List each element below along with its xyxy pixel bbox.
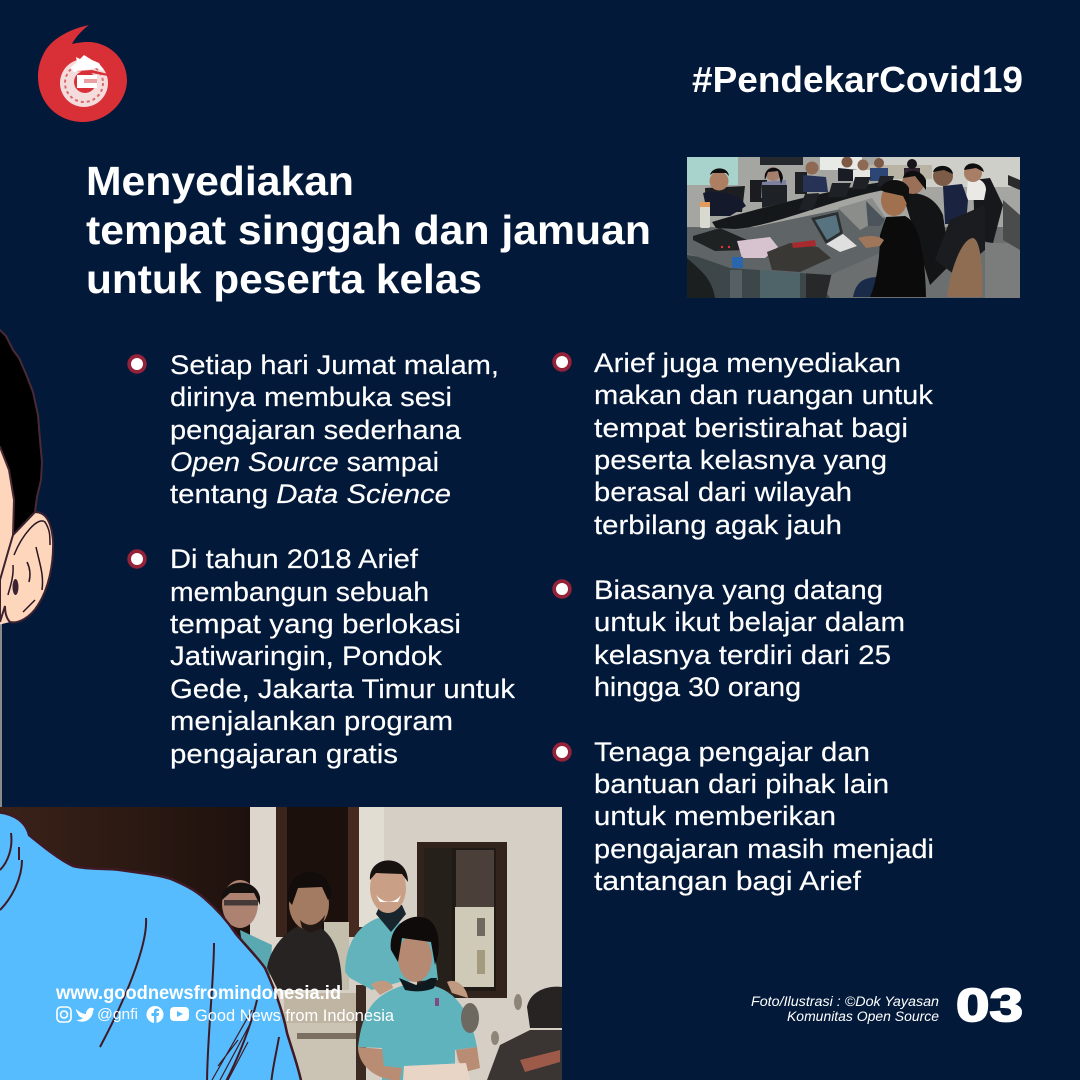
right text column: peserta kelasnya yang (594, 445, 887, 475)
left text column: Di tahun 2018 Arief (170, 544, 419, 574)
bullet (552, 579, 572, 599)
photo: class participants in meeting room (687, 156, 1020, 298)
footer: website and social media handles: www.goodnewsfromindonesia.id (55, 983, 341, 1004)
front row people (853, 163, 1003, 297)
back row people (703, 156, 920, 216)
illustration: blue shirt shoulder (0, 812, 302, 1080)
right text column: untuk ikut belajar dalam (594, 607, 905, 637)
right text column: berasal dari wilayah (594, 477, 852, 507)
right text column (552, 348, 934, 896)
photo credit (751, 994, 939, 1024)
icon: instagram (57, 1007, 71, 1022)
left text column: menjalankan program (170, 706, 453, 736)
footer: website and social media handles: @gnfi (97, 1006, 138, 1023)
title: tempat singgah dan jamuan (86, 207, 651, 253)
right text column: kelasnya terdiri dari 25 (594, 640, 891, 670)
bullet (552, 742, 572, 762)
footer: website and social media handles: Good News from Indonesia (195, 1006, 395, 1025)
right text column: tempat beristirahat bagi (594, 413, 908, 443)
left text column (127, 350, 516, 769)
hashtag: #PendekarCovid19 (692, 59, 1023, 100)
illustration: head with hair and ear (0, 328, 53, 807)
page number: 03 (956, 979, 1023, 1031)
icon: youtube (170, 1007, 189, 1021)
left text column: pengajaran gratis (170, 739, 398, 769)
left text column: Open Source sampai (170, 447, 439, 477)
bullet (552, 352, 572, 372)
right text column: untuk memberikan (594, 801, 836, 831)
right text column: terbilang agak jauh (594, 510, 842, 540)
footer: website and social media handles (55, 983, 395, 1025)
bullet (127, 354, 147, 374)
icon: twitter (76, 1008, 94, 1022)
left text column: tentang Data Science (170, 479, 451, 509)
right text column: bantuan dari pihak lain (594, 769, 889, 799)
right text column: Arief juga menyediakan (594, 348, 901, 378)
icon: facebook (146, 1006, 164, 1023)
person in dark shirt (267, 872, 342, 990)
left text column: dirinya membuka sesi (170, 382, 452, 412)
right text column: makan dan ruangan untuk (594, 380, 934, 410)
photo: group of volunteers in front of building (0, 807, 562, 1080)
person with glasses (222, 880, 272, 975)
left text column: Gede, Jakarta Timur untuk (170, 674, 516, 704)
title: untuk peserta kelas (86, 256, 482, 302)
logo: GNFI red swirl emblem (38, 25, 127, 122)
right text column: tantangan bagi Arief (594, 866, 862, 896)
left text column: membangun sebuah (170, 577, 429, 607)
bullet (127, 549, 147, 569)
title (86, 158, 651, 302)
left text column: Jatiwaringin, Pondok (170, 641, 443, 671)
photo credit: Foto/Ilustrasi : ©Dok Yayasan (751, 994, 939, 1009)
window with newspaper (417, 842, 507, 998)
left text column: pengajaran sederhana (170, 415, 461, 445)
right text column: Tenaga pengajar dan (594, 737, 870, 767)
person holding cloth (358, 917, 480, 1080)
table items (693, 201, 885, 272)
photo credit: Komunitas Open Source (787, 1009, 939, 1024)
motorbike and helmets (461, 987, 562, 1080)
smiling person (345, 860, 438, 990)
right text column: pengajaran masih menjadi (594, 834, 934, 864)
left text column: tempat yang berlokasi (170, 609, 461, 639)
right text column: Biasanya yang datang (594, 575, 883, 605)
title: Menyediakan (86, 158, 354, 204)
left text column: Setiap hari Jumat malam, (170, 350, 499, 380)
right text column: hingga 30 orang (594, 672, 801, 702)
